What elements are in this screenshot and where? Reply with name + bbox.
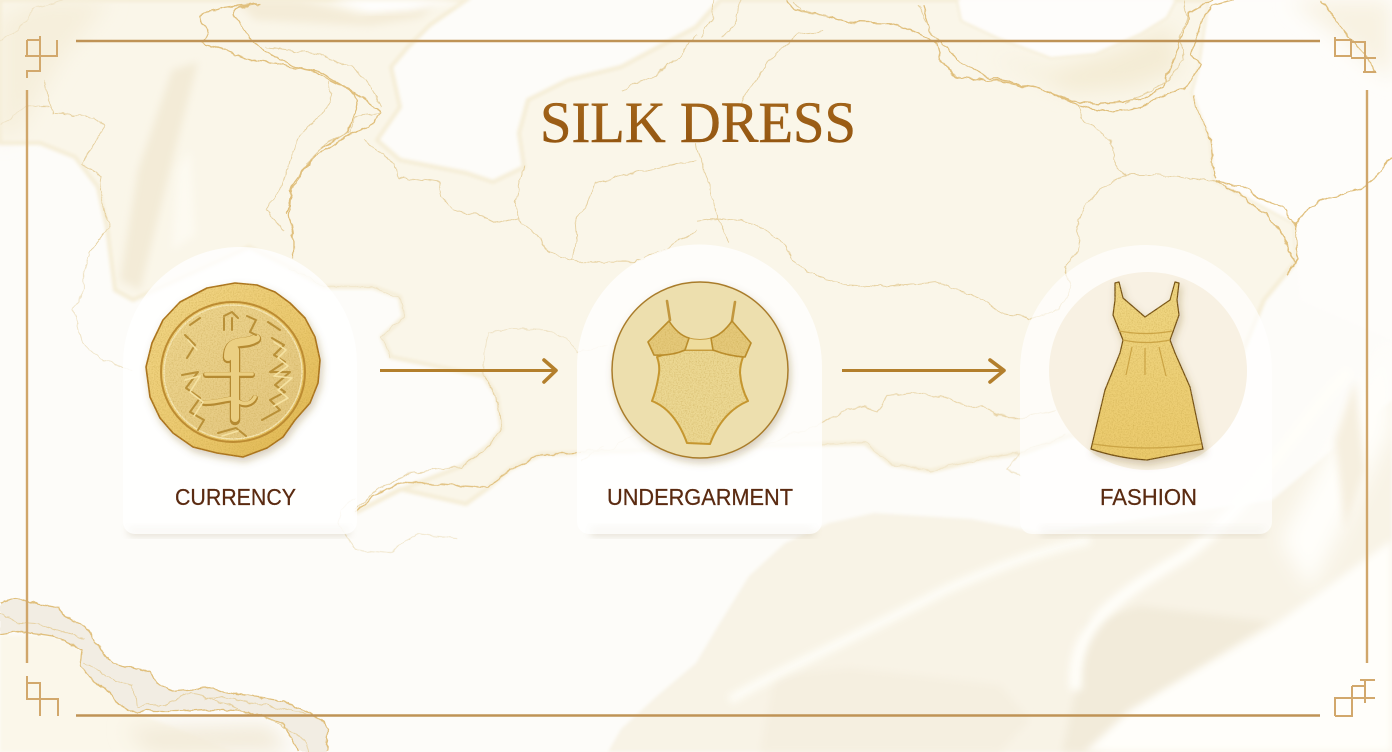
icon: bodysuit on disc	[612, 282, 788, 458]
corner ornament: top right	[1335, 37, 1376, 72]
card: currency	[123, 247, 357, 534]
card: undergarment	[577, 244, 822, 534]
panel: undergarment	[577, 244, 822, 536]
arrow: currency to undergarment	[380, 360, 556, 382]
gold veins, top right	[696, 0, 1392, 318]
arrow: undergarment to fashion	[842, 360, 1004, 382]
icon: gold coin	[146, 283, 320, 457]
label: undergarment: UNDERGARMENT	[607, 484, 793, 510]
panel: currency	[123, 247, 357, 536]
panel: fashion	[1020, 245, 1272, 536]
gold veins, lower centre right	[767, 376, 1233, 476]
gold veins, lower centre left	[337, 376, 635, 553]
gold veins, top left	[0, 0, 696, 376]
marble band, bottom left	[0, 598, 328, 752]
title: SILK DRESS	[540, 90, 856, 155]
label: currency: CURRENCY	[175, 484, 296, 510]
card: fashion	[1020, 245, 1272, 534]
label: fashion: FASHION	[1100, 484, 1197, 510]
corner ornament: bottom left	[27, 676, 58, 716]
corner ornament: top left	[25, 36, 57, 78]
corner ornament: bottom right	[1335, 680, 1375, 716]
icon: dress on disc	[1049, 272, 1247, 470]
